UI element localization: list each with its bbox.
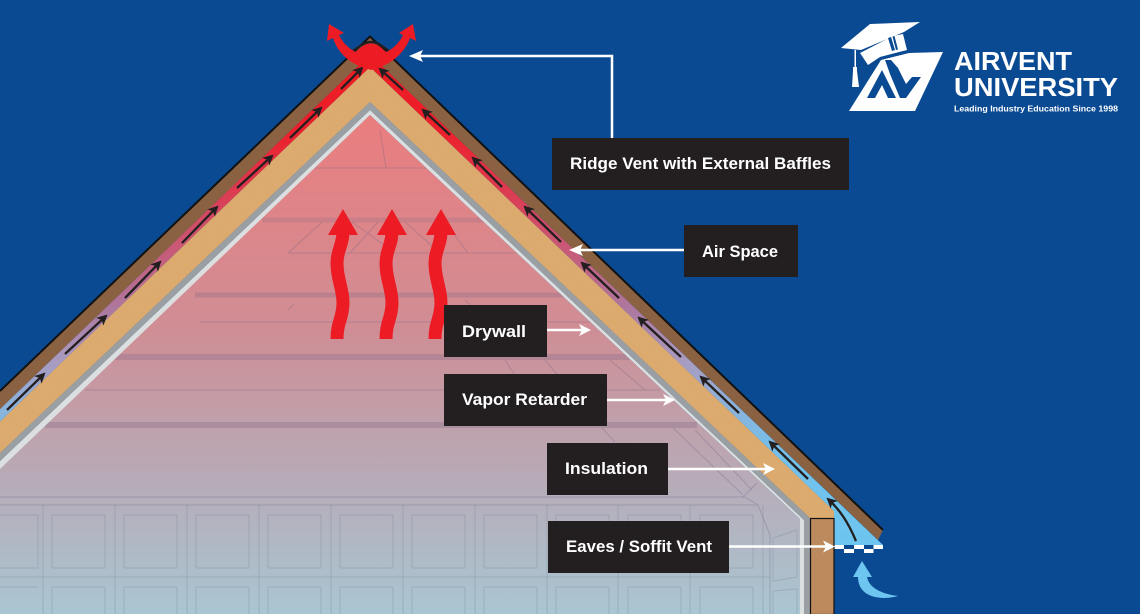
airflow arrows in air space bbox=[7, 68, 856, 541]
attic interior wall bbox=[0, 115, 800, 614]
insulation layer bbox=[0, 67, 834, 518]
ridge vent with exhaust arrows bbox=[327, 24, 416, 70]
drywall layer bbox=[0, 110, 804, 614]
soffit vent checker bbox=[834, 545, 883, 553]
right exhaust arrow bbox=[370, 24, 416, 70]
logo: Airvent University bbox=[841, 22, 1118, 114]
label: eaves soffit vent: Eaves / Soffit Vent bbox=[566, 538, 713, 556]
label: vapor retarder bbox=[444, 374, 675, 426]
left exhaust arrow bbox=[327, 24, 372, 70]
interior siding and garage door lines bbox=[0, 130, 797, 614]
icon: AV parallelogram bbox=[849, 52, 943, 111]
label: insulation bbox=[547, 443, 775, 495]
heat arrow 1 bbox=[328, 209, 358, 339]
icon: graduation cap bbox=[841, 22, 920, 87]
label: air space: Air Space bbox=[702, 243, 778, 261]
logo: Airvent University: UNIVERSITY bbox=[954, 72, 1118, 102]
label: ridge vent bbox=[409, 50, 849, 190]
rising heat arrows bbox=[328, 209, 456, 339]
air space layer bbox=[0, 54, 883, 545]
label: drywall: Drywall bbox=[462, 323, 526, 341]
logo tagline: Leading Industry Education Since 1998 bbox=[954, 104, 1118, 114]
wall stud bbox=[810, 518, 834, 614]
label: drywall bbox=[444, 305, 591, 357]
intake air arrow bbox=[853, 561, 898, 598]
roof deck bbox=[0, 36, 883, 540]
vapor retarder layer bbox=[0, 102, 810, 614]
logo wordmark: AIRVENT bbox=[954, 48, 1072, 76]
heat arrow 3 bbox=[426, 209, 456, 339]
label: insulation: Insulation bbox=[565, 460, 648, 478]
label: vapor retarder: Vapor Retarder bbox=[462, 391, 588, 409]
label: eaves soffit vent bbox=[548, 521, 835, 573]
heat arrow 2 bbox=[377, 209, 407, 339]
label: air space bbox=[569, 225, 798, 277]
label: ridge vent: Ridge Vent with External Baffles bbox=[570, 155, 831, 173]
